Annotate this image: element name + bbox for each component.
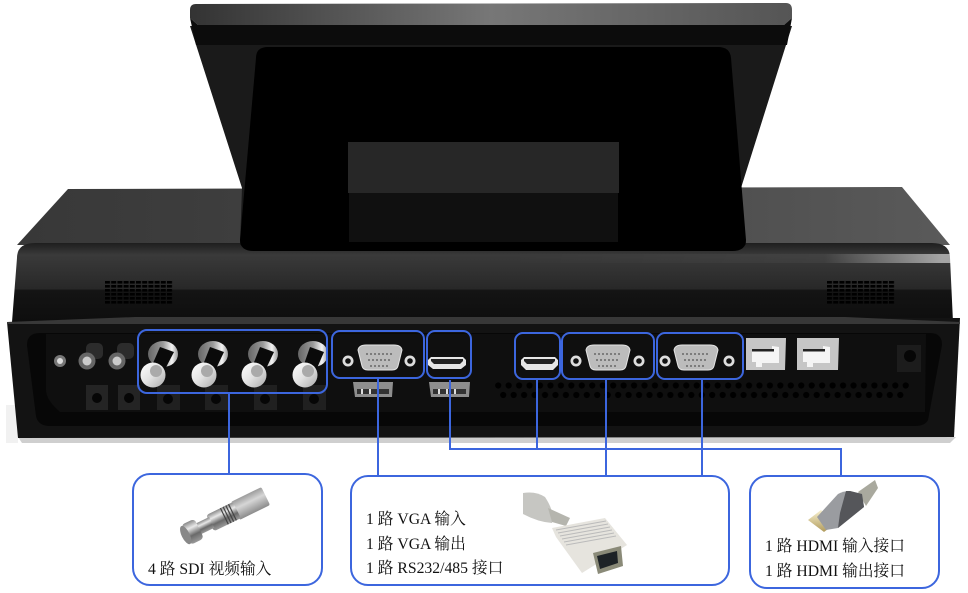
- BNC connector 4: [292, 341, 328, 388]
- label: VGA input: 1 路 VGA 输入: [366, 510, 466, 528]
- lower jack sockets: [86, 385, 326, 410]
- icon: VGA cable: [523, 492, 627, 574]
- RS232 port: [660, 345, 734, 370]
- panel: SDI input: [133, 474, 322, 585]
- device: rear connector panel: [6, 317, 960, 443]
- leader: HDMI bus: [450, 380, 841, 477]
- label: RS232/485: 1 路 RS232/485 接口: [366, 559, 503, 577]
- HDMI port output: [521, 357, 558, 370]
- frame: SDI ports: [138, 330, 327, 393]
- panel box: [351, 476, 729, 585]
- device: tilted display: [190, 3, 792, 251]
- panel box: [750, 476, 939, 588]
- BNC connector 2: [192, 341, 228, 388]
- leader: VGA output: [605, 380, 607, 476]
- panel recess: [27, 333, 942, 426]
- device: base unit: [12, 187, 953, 322]
- base top surface: [17, 187, 950, 245]
- frame: VGA output: [562, 333, 654, 379]
- display top band: [190, 3, 792, 25]
- panel: HDMI: [750, 476, 939, 588]
- panel silver edge: [18, 437, 956, 443]
- HDMI port input: [428, 357, 466, 369]
- frame: RS232: [657, 333, 743, 379]
- leader: SDI: [228, 393, 230, 473]
- connector face: [46, 334, 926, 412]
- panel shadow: [6, 405, 18, 443]
- power socket: [897, 345, 921, 372]
- panel body: [7, 318, 960, 438]
- display dark band: [190, 18, 792, 45]
- panel ledge: [7, 317, 960, 324]
- base front face: [12, 243, 953, 322]
- label: VGA output: 1 路 VGA 输出: [366, 535, 466, 553]
- speaker grille left: [105, 281, 173, 305]
- BNC connector 1: [140, 341, 178, 388]
- stand plate lower: [349, 193, 618, 242]
- leader: RS232: [701, 380, 703, 476]
- frame: HDMI input: [427, 331, 471, 378]
- icon: BNC plug: [177, 486, 271, 547]
- display back shell: [190, 26, 792, 245]
- USB port right: [429, 382, 470, 397]
- RJ45 port 2: [797, 338, 839, 370]
- panel: VGA and RS232: [351, 476, 729, 585]
- VGA port output: [570, 345, 644, 370]
- BNC connector 3: [242, 341, 278, 388]
- speaker grille right: [827, 281, 895, 305]
- RJ45 port 1: [746, 338, 786, 370]
- USB port left: [353, 382, 393, 397]
- label: 4 路 SDI 视频输入: [148, 560, 272, 578]
- stand plate upper: [348, 142, 619, 193]
- label: HDMI output: 1 路 HDMI 输出接口: [765, 562, 905, 580]
- display rear recess: [240, 47, 746, 251]
- vent holes: [493, 381, 911, 400]
- frame: VGA input: [332, 331, 424, 378]
- frame: HDMI output: [515, 333, 560, 379]
- label: HDMI input: 1 路 HDMI 输入接口: [765, 537, 905, 555]
- small connectors left: [54, 343, 134, 370]
- front highlight: [500, 254, 951, 263]
- VGA port input: [342, 345, 416, 370]
- leader: VGA: [377, 379, 379, 476]
- icon: HDMI plug: [808, 480, 878, 532]
- panel box: [133, 474, 322, 585]
- callout frames and leader lines: [138, 330, 841, 477]
